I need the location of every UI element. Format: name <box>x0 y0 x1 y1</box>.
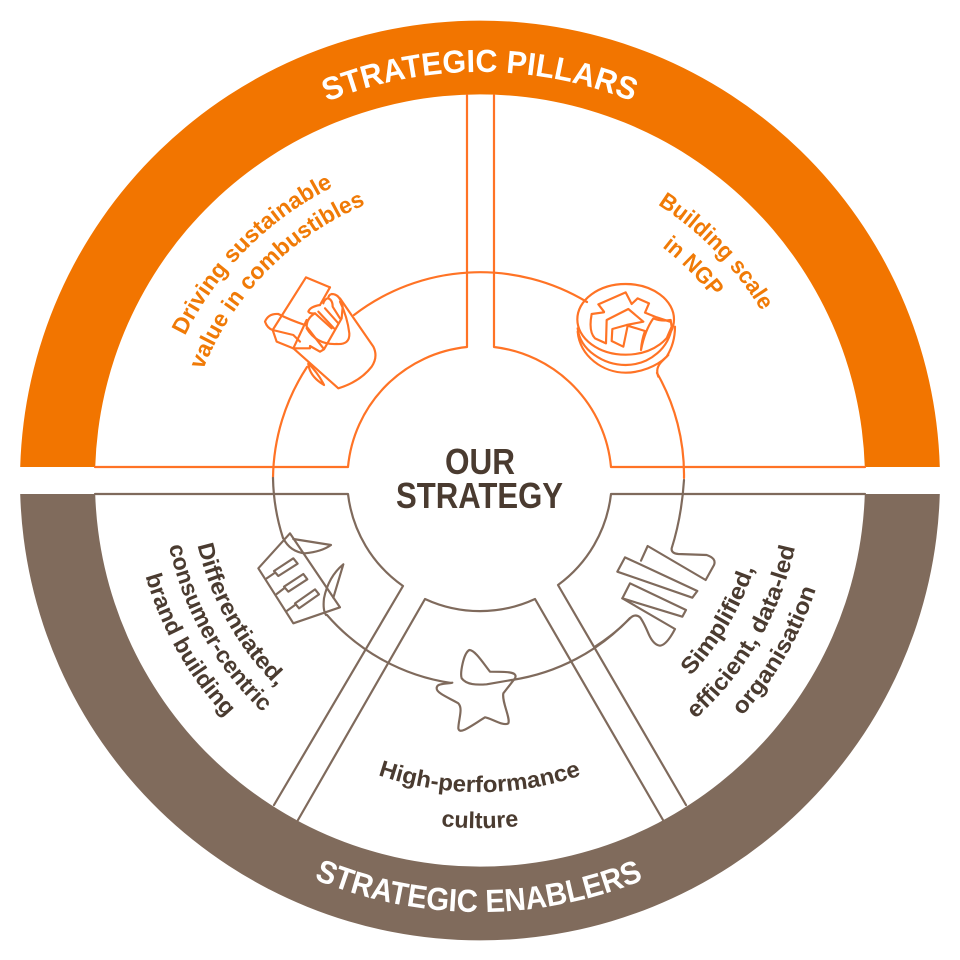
segment outline: differentiated brand building <box>95 494 403 805</box>
panel: strategic pillars band <box>20 21 940 467</box>
title: our strategy: STRATEGY <box>396 475 563 516</box>
connecting ring: orange arcs <box>273 272 684 478</box>
label: high-performance culture: High-performance <box>379 760 580 795</box>
icon: tin with pieces <box>577 284 675 377</box>
label: differentiated consumer-centric brand building: brand building <box>146 572 234 718</box>
panel: strategic enablers band <box>20 494 940 940</box>
title: our strategy: OUR <box>445 441 515 482</box>
segment outline: building scale <box>494 95 865 467</box>
label: driving sustainable value in combustibles: value in combustibles <box>192 195 364 366</box>
icon: brand pack with sails <box>258 533 343 623</box>
label: high-performance culture: culture <box>442 811 518 828</box>
label: building scale in NGP: in NGP <box>663 234 723 292</box>
segment outline: simplified organisation <box>558 494 865 805</box>
icon: stacked bars <box>595 480 715 647</box>
icon: hand holding pack <box>265 277 375 388</box>
segment outline: driving sustainable value <box>95 95 467 467</box>
heading: strategic enablers: STRATEGIC ENABLERS <box>316 860 641 912</box>
label: differentiated consumer-centric brand building: Differentiated, <box>198 542 284 688</box>
label: simplified efficient data-led organisation: Simplified, <box>682 568 757 674</box>
icon: star <box>437 650 516 731</box>
heading: strategic pillars: STRATEGIC PILLARS <box>322 50 637 100</box>
label: differentiated consumer-centric brand building: consumer-centric <box>170 545 269 710</box>
connecting ring: brown arcs <box>273 478 630 683</box>
label: simplified efficient data-led organisation: organisation <box>736 588 816 714</box>
label: driving sustainable value in combustibles: Driving sustainable <box>172 178 331 335</box>
segment outline: high-performance culture <box>298 599 663 820</box>
label: high-performance culture <box>379 760 580 828</box>
label: simplified efficient data-led organisation: efficient, data-led <box>690 544 795 716</box>
title: our strategy <box>396 441 563 516</box>
label: building scale in NGP: Building scale <box>658 192 770 309</box>
